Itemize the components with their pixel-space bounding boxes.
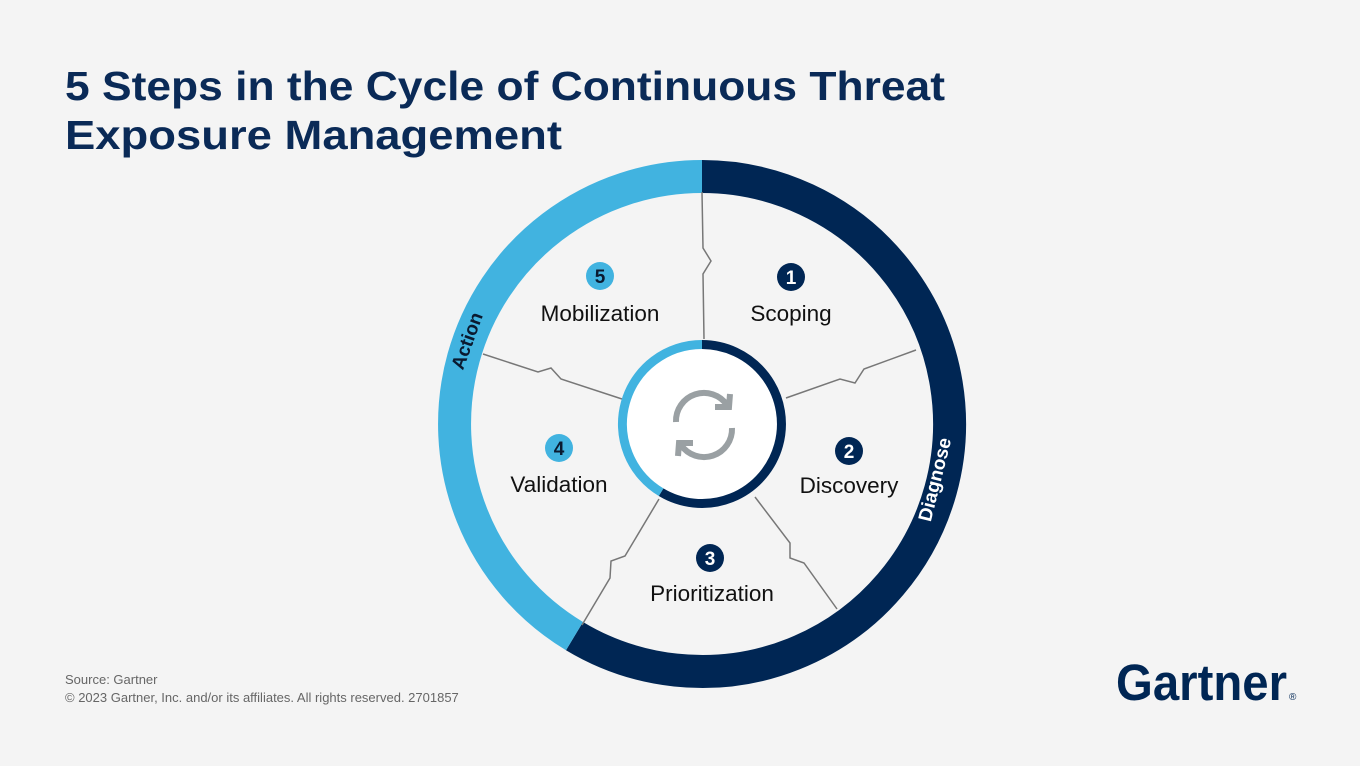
step 5: 5 [595, 267, 606, 288]
inner ring dark [661, 344, 781, 503]
step 3: 3 [705, 549, 715, 570]
divider lines [483, 192, 916, 625]
title [65, 63, 945, 158]
outer ring: diagnose (dark) [574, 176, 950, 671]
step 2: Discovery [800, 473, 899, 498]
step 5: Mobilization [541, 301, 659, 326]
footer source [65, 672, 459, 705]
label: diagnose: Diagnose [915, 436, 956, 524]
step 2 [800, 437, 899, 498]
logo: Gartner: Gartner [1116, 654, 1287, 711]
cycle diagram [448, 176, 956, 671]
center circle [626, 348, 778, 500]
step 4: 4 [554, 439, 565, 460]
step 1 [750, 263, 832, 326]
step 4: Validation [510, 472, 608, 497]
step 5 [541, 262, 659, 326]
footer source: © 2023 Gartner, Inc. and/or its affiliates. All rights reserved. 2701857 [65, 690, 459, 705]
title: 5 Steps in the Cycle of Continuous Threat [65, 63, 945, 109]
icon: refresh arrows [676, 393, 732, 457]
step 2: 2 [844, 442, 854, 463]
logo: Gartner: ® [1289, 692, 1297, 703]
inner ring light [622, 344, 702, 492]
title: Exposure Management [65, 112, 562, 158]
step 4 [510, 434, 608, 497]
label: action: Action [448, 310, 488, 372]
step 3 [650, 544, 774, 606]
step 3: Prioritization [650, 581, 774, 606]
step 1: Scoping [750, 301, 832, 326]
outer ring: action (light) [455, 176, 702, 636]
step 1: 1 [786, 268, 797, 289]
footer source: Source: Gartner [65, 672, 158, 687]
